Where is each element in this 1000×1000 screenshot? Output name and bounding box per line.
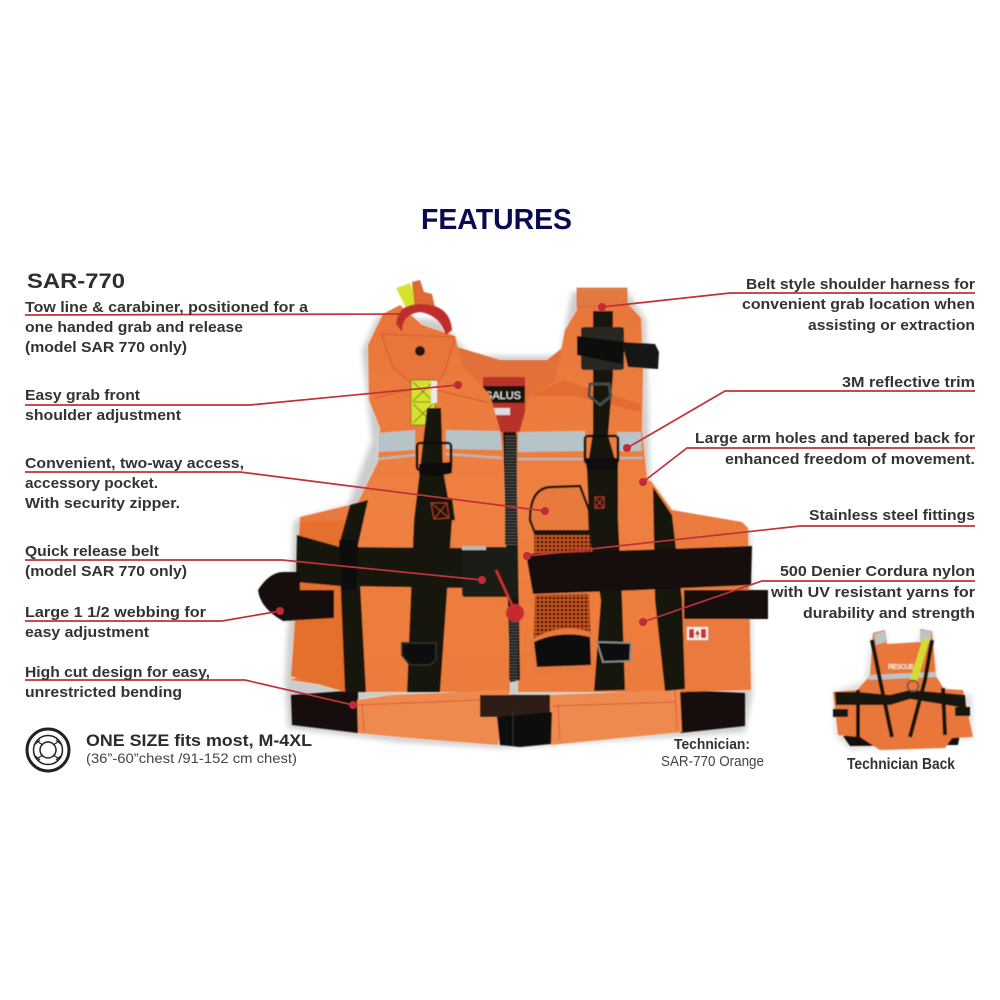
right callout: cordura nylon: durability and strength — [803, 605, 975, 622]
icon: life ring — [27, 729, 69, 771]
inner collar panel — [483, 377, 525, 432]
right callout: reflective trim: 3M reflective trim — [842, 374, 975, 391]
callout leader lines and dots — [25, 293, 975, 709]
title: FEATURES — [421, 204, 572, 236]
left callout: shoulder adjustment: Easy grab front — [25, 387, 140, 404]
right side panel — [640, 480, 751, 692]
D-ring — [589, 384, 611, 405]
size text: (36”-60”chest /91-152 cm chest) — [86, 750, 297, 766]
back vest shadow — [833, 631, 973, 750]
RESCUE lettering: RESCUE — [888, 664, 914, 671]
left strap buckle — [417, 443, 451, 470]
right shoulder strap — [587, 311, 625, 691]
left callout: shoulder adjustment — [25, 387, 181, 424]
left stitched tab — [425, 498, 455, 523]
leader: webbing — [25, 607, 284, 621]
left callout: tow line: (model SAR 770 only) — [25, 339, 187, 356]
product caption: Technician: — [674, 736, 750, 753]
leader: arm holes — [639, 448, 975, 486]
waist strap re-cross — [339, 540, 358, 590]
vest shadow — [285, 292, 752, 748]
zipper — [503, 432, 520, 682]
left callout: pocket: With security zipper. — [25, 495, 180, 512]
right outer strap — [653, 487, 685, 691]
dark centre webbing — [480, 695, 552, 717]
right callout: cordura nylon: 500 Denier Cordura nylon — [780, 563, 975, 580]
reflective trim — [378, 430, 643, 459]
right callout: arm holes — [695, 430, 975, 468]
back vest body — [833, 629, 973, 750]
left callout: quick release belt — [25, 543, 187, 580]
left shoulder flap — [381, 334, 455, 382]
left callout: webbing — [25, 604, 206, 641]
size text — [86, 731, 312, 766]
side buckle — [497, 712, 552, 747]
red carabiner — [396, 304, 452, 335]
size text: ONE SIZE fits most, M-4XL — [86, 731, 312, 750]
waist belt left — [296, 535, 463, 588]
leader: front shoulder adjustment — [25, 381, 462, 405]
bottom webbing — [843, 734, 960, 746]
right callout: shoulder harness: Belt style shoulder harness for — [746, 276, 975, 293]
back straps — [858, 640, 945, 737]
left callout: tow line — [25, 299, 309, 356]
back waist belt — [835, 690, 966, 708]
back view vest illustration — [833, 629, 973, 750]
left callout: high cut — [25, 664, 210, 701]
side webbing right — [684, 590, 768, 619]
quick release buckle — [462, 546, 524, 622]
leader: high cut — [25, 680, 357, 709]
leader: shoulder harness — [598, 293, 975, 311]
leader: quick release belt — [25, 560, 486, 584]
right front panel — [517, 288, 685, 692]
back reflective bands — [868, 630, 936, 680]
right callout: cordura nylon: with UV resistant yarns for — [770, 584, 975, 601]
right callout: arm holes: Large arm holes and tapered back for — [695, 430, 975, 447]
lining behind neck — [440, 340, 566, 440]
right callout: shoulder harness: assisting or extraction — [808, 317, 975, 334]
left callout: high cut: High cut design for easy, — [25, 664, 210, 681]
leader: stainless fittings — [523, 526, 975, 560]
left callout: pocket: Convenient, two-way access, — [25, 455, 244, 472]
product caption: SAR-770 Orange — [661, 753, 764, 770]
waist belt right — [526, 546, 752, 594]
side webbing left — [258, 572, 334, 621]
left front panel — [345, 305, 510, 692]
back steel ring — [908, 680, 918, 692]
right callout: cordura nylon — [770, 563, 975, 622]
Canadian flag patch — [687, 627, 708, 640]
bottom skirt right — [550, 690, 682, 745]
leader: tow line — [25, 309, 409, 317]
left side panel — [290, 505, 356, 690]
right lower ladder lock — [597, 642, 631, 662]
product caption — [661, 736, 764, 770]
leader: cordura nylon — [639, 581, 975, 626]
model name: SAR-770 — [27, 270, 125, 293]
bottom skirt left — [357, 690, 510, 745]
yellow grab tab — [411, 380, 437, 425]
right callout: shoulder harness: convenient grab location when — [742, 296, 975, 313]
right shoulder collar — [577, 288, 627, 307]
right callout: shoulder harness — [742, 276, 975, 334]
left callout: pocket: accessory pocket. — [25, 475, 158, 492]
velcro keeper — [577, 327, 659, 370]
left shoulder strap — [407, 408, 452, 692]
label SALUS — [483, 386, 525, 415]
back yellow tow strap — [910, 638, 930, 682]
right strap buckle — [585, 436, 618, 463]
left callout: quick release belt: Quick release belt — [25, 543, 159, 560]
left callout: webbing: Large 1 1/2 webbing for — [25, 604, 206, 621]
left outer strap — [339, 500, 368, 692]
bottom belt right — [680, 690, 745, 733]
right shoulder fold — [530, 380, 640, 412]
back caption: Technician Back — [847, 756, 955, 773]
left callout: webbing: easy adjustment — [25, 624, 149, 641]
bottom belt left — [291, 690, 358, 733]
main vest illustration — [258, 280, 768, 748]
left callout: high cut: unrestricted bending — [25, 684, 182, 701]
left callout: quick release belt: (model SAR 770 only) — [25, 563, 187, 580]
left lower ladder lock — [402, 643, 436, 665]
left callout: shoulder adjustment: shoulder adjustment — [25, 407, 181, 424]
pocket — [530, 486, 597, 676]
right stitched tab — [595, 497, 604, 508]
back side tabs — [833, 707, 970, 717]
leader: accessory pocket — [25, 472, 549, 515]
right callout: stainless fittings: Stainless steel fittings — [809, 507, 975, 524]
label SALUS: SALUS — [485, 390, 521, 402]
left callout: pocket — [25, 455, 244, 512]
right callout: arm holes: enhanced freedom of movement. — [725, 451, 975, 468]
left callout: tow line: one handed grab and release — [25, 319, 243, 336]
tow line toggle — [396, 283, 419, 310]
left callout: tow line: Tow line & carabiner, positioned for a — [25, 299, 309, 316]
leader: reflective trim — [623, 391, 975, 452]
